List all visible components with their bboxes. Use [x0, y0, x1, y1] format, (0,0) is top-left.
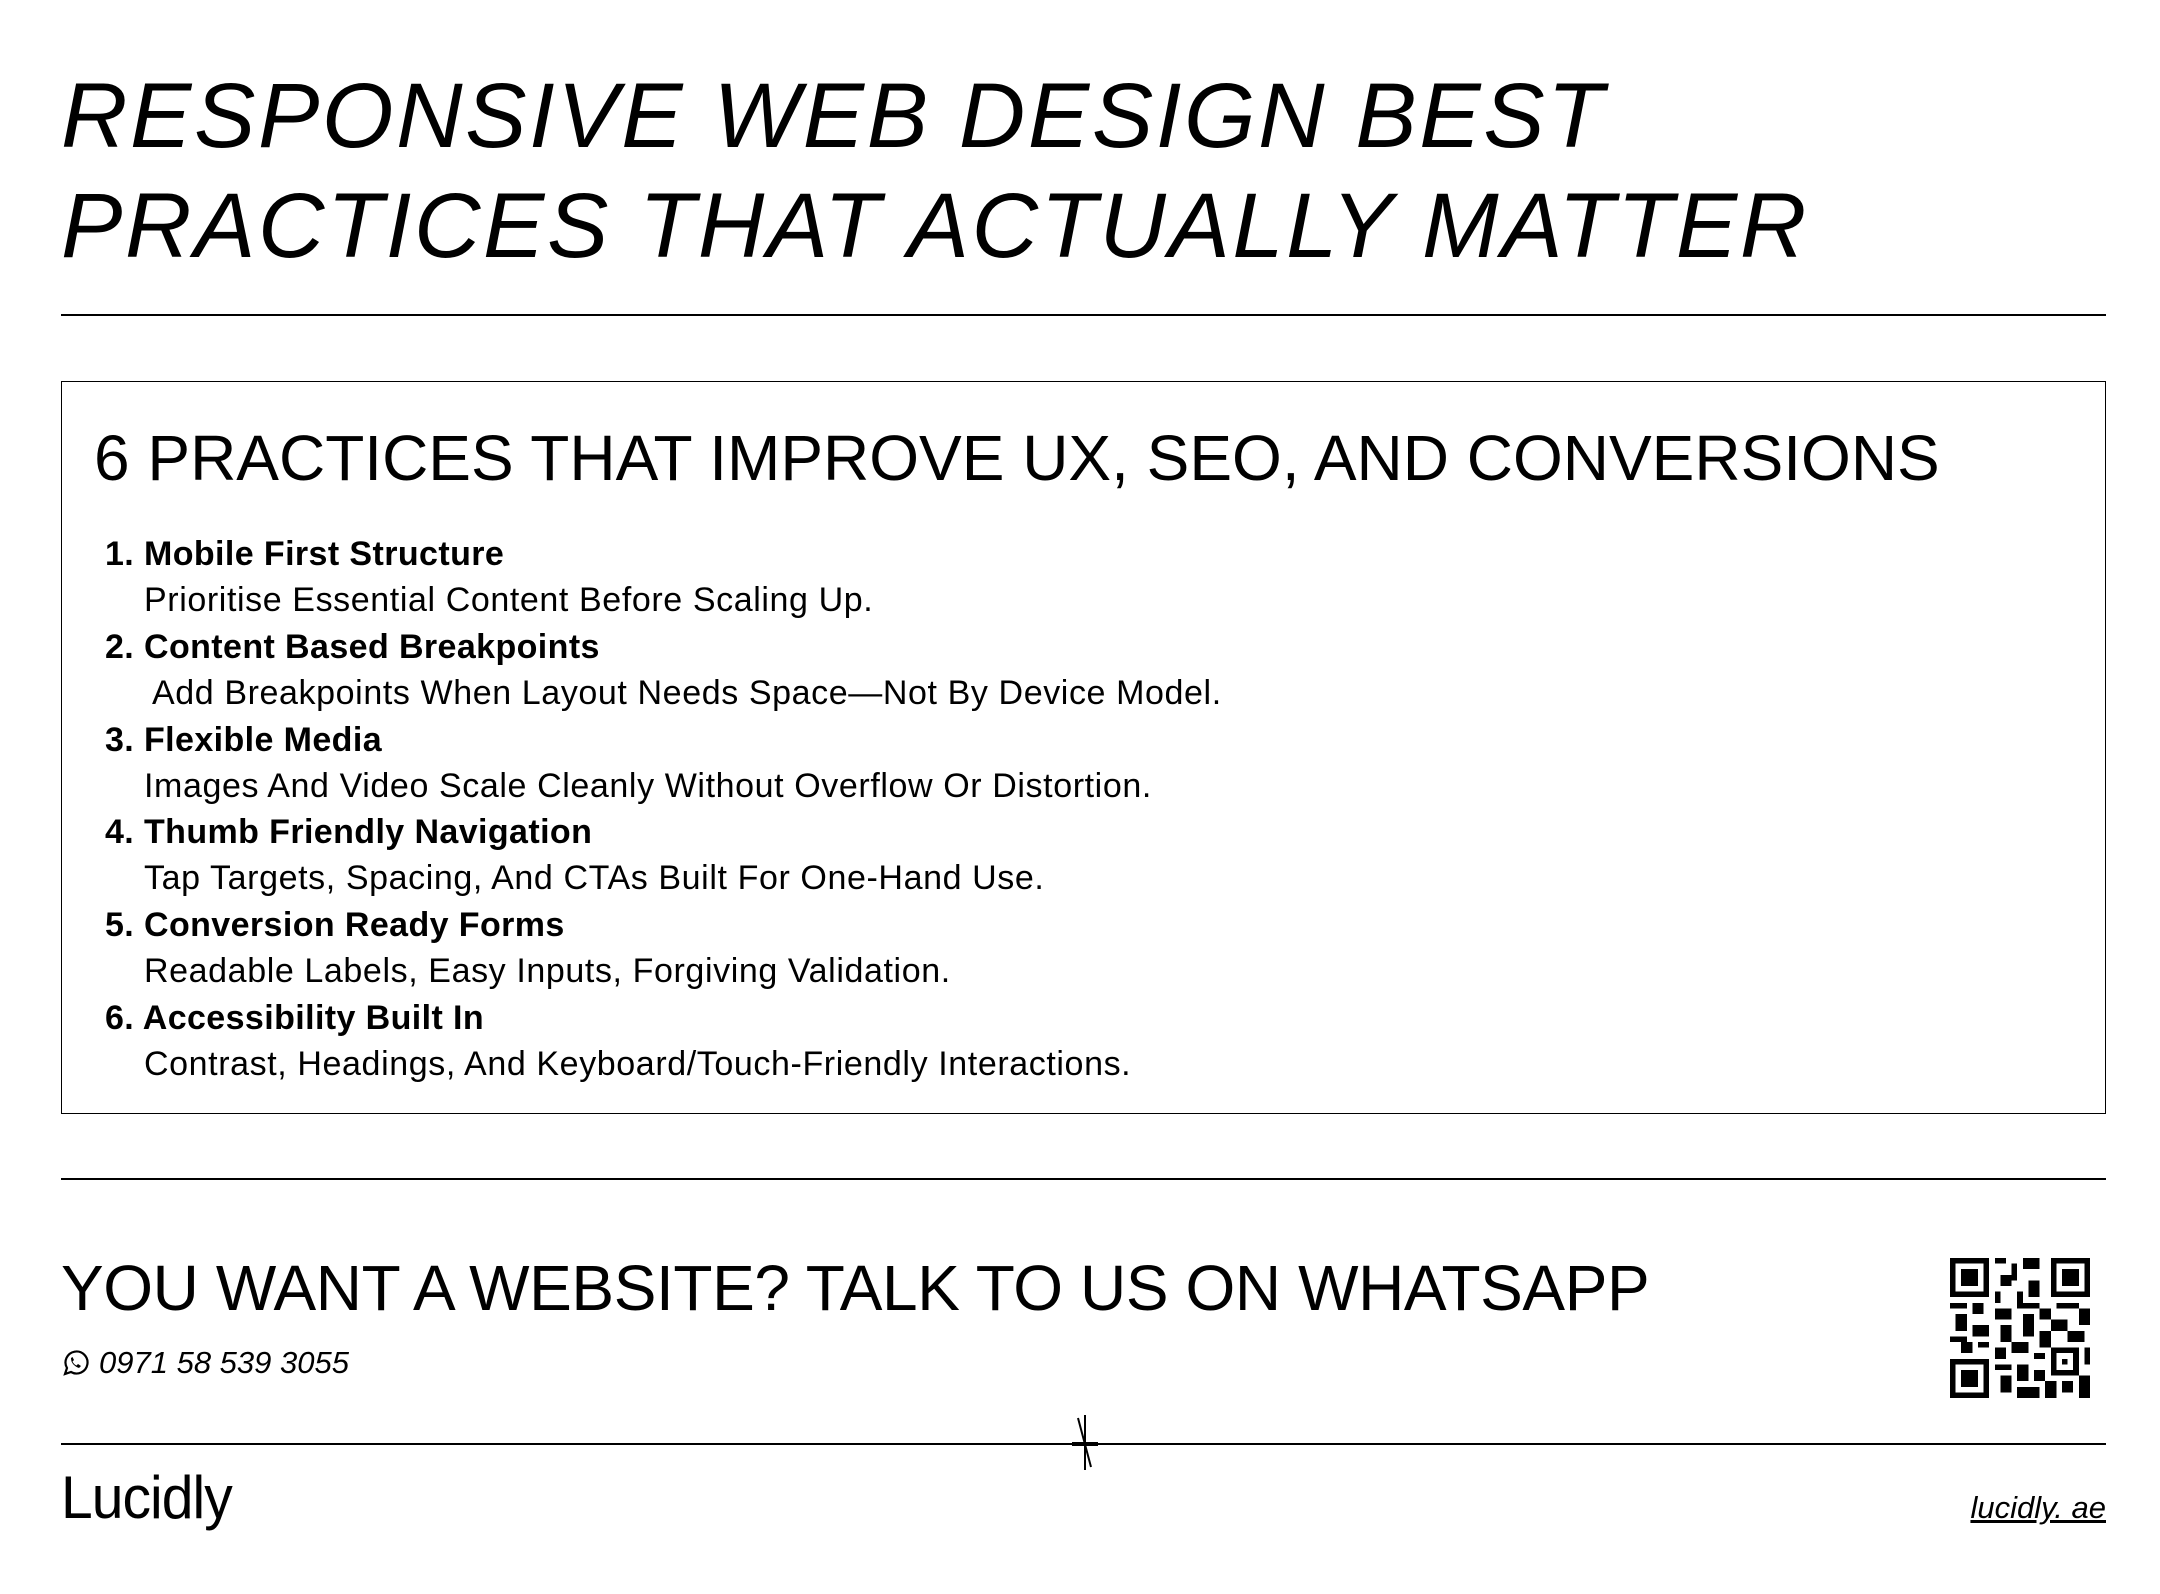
list item 2	[105, 628, 1222, 712]
logo: Lucidly	[61, 1464, 232, 1531]
list item 6: Contrast, Headings, And Keyboard/Touch-Friendly Interactions.	[144, 1045, 1131, 1083]
list item 6	[105, 999, 1131, 1083]
title	[61, 65, 1809, 277]
panel heading: 6 PRACTICES THAT IMPROVE UX, SEO, AND CONVERSIONS	[94, 422, 1940, 494]
list item 4: 4. Thumb Friendly Navigation	[105, 813, 592, 851]
website link: lucidly. ae	[1970, 1490, 2106, 1525]
list item 3	[105, 721, 1152, 805]
phone contact: 0971 58 539 3055	[99, 1345, 349, 1380]
panel: practices	[61, 381, 2106, 1114]
icon: whatsapp	[63, 1350, 89, 1376]
QR code	[1950, 1258, 2090, 1398]
list item 5: Readable Labels, Easy Inputs, Forgiving Validation.	[144, 952, 951, 990]
list item 3: 3. Flexible Media	[105, 721, 382, 759]
list item 2: Add Breakpoints When Layout Needs Space—Not By Device Model.	[152, 674, 1222, 712]
list item 2: 2. Content Based Breakpoints	[105, 628, 600, 666]
title: PRACTICES THAT ACTUALLY MATTER	[61, 175, 1809, 277]
list item 6: 6. Accessibility Built In	[105, 999, 484, 1037]
list item 4	[105, 813, 1044, 897]
list item 1: Prioritise Essential Content Before Scaling Up.	[144, 581, 873, 619]
title: RESPONSIVE WEB DESIGN BEST	[61, 65, 1606, 167]
list item 1	[105, 535, 873, 619]
list item 5	[105, 906, 951, 990]
list item 1: 1. Mobile First Structure	[105, 535, 504, 573]
list item 4: Tap Targets, Spacing, And CTAs Built For One-Hand Use.	[144, 859, 1044, 897]
list item 3: Images And Video Scale Cleanly Without Overflow Or Distortion.	[144, 767, 1152, 805]
list item 5: 5. Conversion Ready Forms	[105, 906, 565, 944]
CTA heading: YOU WANT A WEBSITE? TALK TO US ON WHATSAPP	[61, 1252, 1649, 1324]
icon: crosshair	[1072, 1415, 1098, 1470]
